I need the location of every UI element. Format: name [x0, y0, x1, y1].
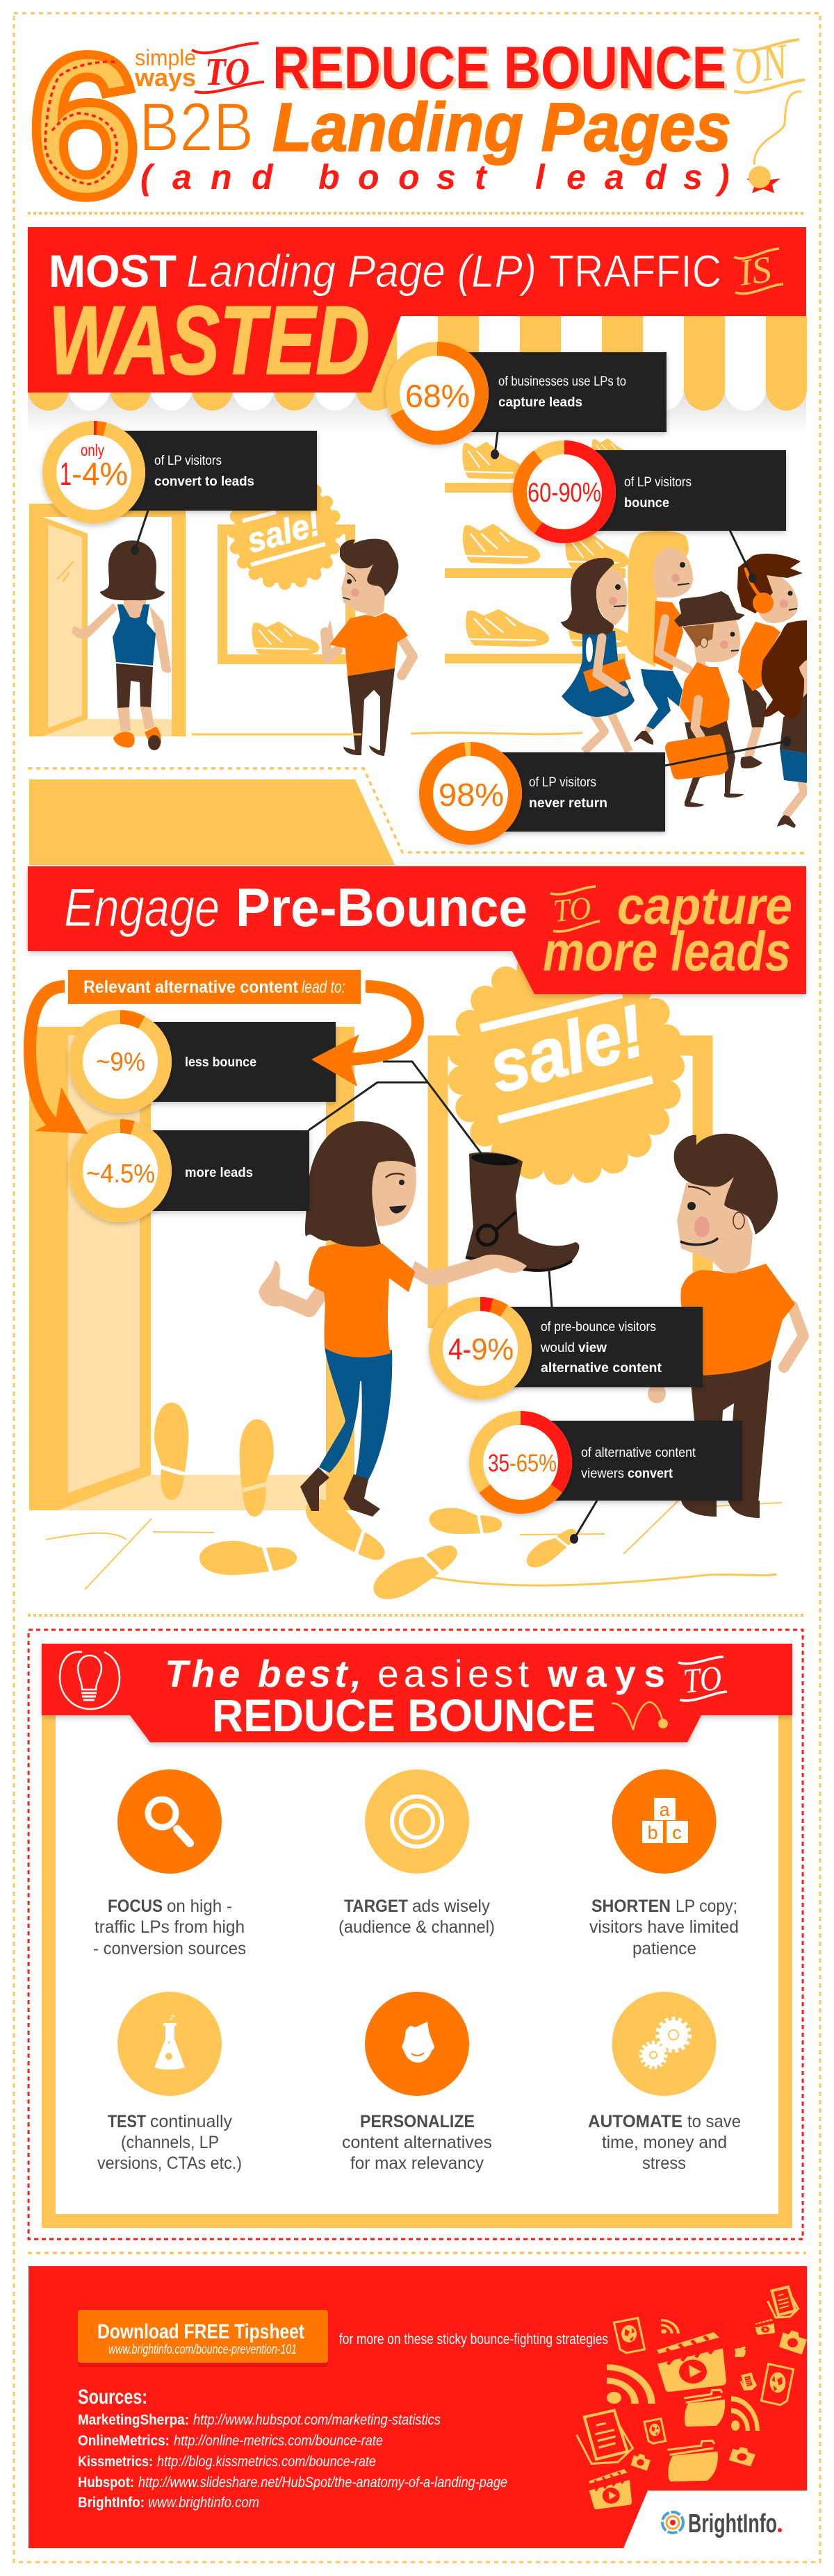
sources list: http://www.slideshare.net/HubSpot/the-anatomy-of-a-landing-page [138, 2475, 507, 2491]
icon: head [402, 2022, 434, 2063]
sources list: BrightInfo: [78, 2495, 145, 2511]
boot product [466, 1152, 579, 1271]
callout 4-9 percent: alternative content [541, 1361, 662, 1376]
arrow right to less bounce [311, 986, 418, 1087]
stat value [448, 1332, 514, 1367]
stat value [488, 1450, 557, 1477]
footer panel [28, 2266, 807, 2548]
relevant content label: Relevant alternative content [83, 977, 299, 997]
callout 60-90 percent: of LP visitors [624, 475, 692, 490]
banner heading line: MOST [49, 245, 177, 297]
callout 4-9 percent: of pre-bounce visitors [541, 1320, 656, 1335]
callout 60-90 percent: bounce [624, 496, 669, 511]
callout 4-9 percent: view [578, 1341, 607, 1355]
tip shorten: LP copy; [676, 1897, 737, 1916]
and boost leads: (and boost leads) [140, 158, 730, 197]
tip focus: FOCUS [108, 1897, 163, 1916]
stat value: -65% [509, 1450, 557, 1477]
connector lines section 1 [131, 432, 791, 766]
serif word TO: TO [205, 51, 250, 94]
stat value: 98% [439, 777, 504, 813]
capture more leads: capture [617, 877, 792, 936]
callout 1-4 percent: of LP visitors [154, 454, 222, 468]
sources list: Sources: [78, 2386, 147, 2409]
tip test [97, 1992, 242, 2173]
headphone man [737, 554, 803, 768]
tip focus: traffic LPs from high [95, 1917, 245, 1937]
shoppers group [561, 531, 808, 828]
relevant content label: lead to: [302, 977, 345, 997]
tips panel [28, 1630, 803, 2239]
callout 35-65 percent: viewers [581, 1467, 624, 1481]
stat value: 9% [471, 1332, 514, 1367]
sources list: www.brightinfo.com [148, 2495, 259, 2511]
tip target: TARGET [344, 1897, 408, 1916]
sources list: Hubspot: [78, 2475, 134, 2491]
heading line: easiest [377, 1652, 529, 1695]
woman with blue dress [561, 558, 635, 752]
callout 1-4 percent [42, 421, 317, 524]
icon: target [392, 1797, 442, 1847]
download button: www.brightinfo.com/bounce-prevention-101 [108, 2343, 297, 2357]
icon: abc blocks: c [672, 1822, 682, 1843]
icon: magnifier [148, 1799, 190, 1843]
callout 4.5 percent more leads: more leads [185, 1166, 253, 1180]
tip automate: time, money and [602, 2133, 727, 2152]
tips red banner [42, 1644, 792, 1742]
serif word ON: ON [730, 33, 792, 96]
banner heading: Pre-Bounce [236, 877, 528, 938]
tip focus: - conversion sources [93, 1939, 246, 1958]
woman section 2 [259, 1121, 527, 1517]
section 1 red banner [28, 227, 806, 395]
awning [28, 316, 807, 432]
shoe in window [252, 622, 319, 655]
tip personalize: PERSONALIZE [360, 2112, 475, 2131]
sources list [78, 2386, 507, 2511]
tip shorten: patience [632, 1939, 696, 1958]
section 2 red banner [28, 866, 806, 994]
sale label: sale! [481, 990, 653, 1109]
serif word TO: TO [552, 890, 593, 929]
blonde woman [627, 531, 693, 745]
callout 9 percent less bounce [69, 1010, 336, 1113]
capture more leads: more leads [543, 920, 791, 982]
icon: flask [154, 2015, 185, 2070]
store door left [29, 504, 186, 736]
tip shorten: SHORTEN [591, 1897, 671, 1916]
tip automate [588, 1992, 741, 2173]
icon: abc blocks: b [647, 1822, 658, 1843]
sale window section 2 [438, 962, 703, 1328]
tip automate: to save [687, 2112, 741, 2131]
callout 1-4 percent: convert to leads [154, 474, 254, 489]
tip personalize: content alternatives [342, 2133, 492, 2152]
heading line: The best, [165, 1652, 361, 1695]
sale label: sale! [243, 504, 324, 561]
icon: lightbulb [60, 1652, 120, 1709]
shopkeeper man [325, 539, 413, 756]
icon: abc blocks [642, 1798, 688, 1843]
callout 4-9 percent: would [540, 1341, 575, 1355]
arrow left to more leads [30, 986, 88, 1134]
heading line REDUCE BOUNCE: REDUCE BOUNCE [272, 35, 726, 101]
man with hat and suitcase [665, 591, 745, 807]
callout 98 percent: never return [529, 796, 607, 811]
stat value: only [81, 441, 104, 459]
BrightInfo logo: BrightInfo [688, 2509, 777, 2538]
stat value: 35 [488, 1450, 509, 1477]
callout 9 percent less bounce: less bounce [185, 1055, 256, 1070]
relevant content label [68, 970, 361, 1004]
footprints and floor lines [46, 1403, 782, 1607]
tip target [338, 1769, 495, 1937]
banner heading [64, 877, 528, 938]
banner heading line: TRAFFIC [549, 245, 721, 297]
download button [78, 2310, 328, 2367]
callout 68 percent: capture leads [498, 395, 582, 410]
banner heading line: Landing Page (LP) [186, 245, 537, 297]
sources list: http://online-metrics.com/bounce-rate [174, 2433, 383, 2449]
tip shorten [589, 1769, 739, 1958]
WASTED: WASTED [49, 286, 370, 395]
sources list: http://www.hubspot.com/marketing-statistics [193, 2412, 441, 2428]
subtitle simple ways [134, 45, 196, 92]
bounce squiggle [612, 1702, 668, 1730]
lower section shape [28, 768, 806, 865]
stat value: 4- [448, 1332, 471, 1367]
subtitle simple ways: simple [135, 45, 196, 70]
banner heading line [49, 245, 721, 297]
stat value: 68% [405, 378, 470, 414]
media icon cluster [577, 2287, 807, 2509]
callout 4-9 percent [429, 1297, 703, 1400]
tip test: versions, CTAs etc.) [97, 2154, 242, 2173]
callout 98 percent: of LP visitors [529, 775, 596, 790]
numeral 6: 6 [31, 20, 136, 231]
serif word TO [192, 43, 264, 94]
stat value [60, 441, 128, 492]
tip automate: stress [642, 2154, 686, 2173]
sources list: Kissmetrics: [78, 2454, 153, 2470]
sources list: http://blog.kissmetrics.com/bounce-rate [157, 2454, 376, 2470]
callout 35-65 percent: convert [628, 1467, 673, 1481]
woman entering door [72, 540, 171, 750]
callout 68 percent: of businesses use LPs to [498, 374, 626, 389]
callout 35-65 percent [469, 1411, 742, 1514]
sources list: OnlineMetrics: [78, 2433, 170, 2449]
tip personalize: for max relevancy [350, 2154, 484, 2173]
callout 68 percent [386, 342, 667, 445]
banner heading: Engage [64, 877, 220, 938]
icon: abc blocks: a [659, 1799, 670, 1820]
title block [31, 20, 805, 231]
icon: gears [641, 2019, 689, 2067]
tip test: continually [150, 2112, 232, 2131]
stat value: -4% [72, 456, 128, 492]
tip focus: on high - [167, 1897, 232, 1916]
tip personalize [342, 1992, 492, 2173]
tip automate: AUTOMATE [588, 2112, 682, 2131]
serif word IS: IS [735, 248, 774, 294]
REDUCE BOUNCE: REDUCE BOUNCE [212, 1690, 596, 1741]
Landing Pages: Landing Pages [272, 89, 731, 165]
heading line [165, 1652, 665, 1695]
stat value: 1 [60, 456, 72, 492]
stat value: ~9% [96, 1048, 145, 1077]
subtitle simple ways: ways [134, 63, 196, 92]
capture more leads [543, 877, 792, 982]
man section 2 [648, 1134, 803, 1518]
heading line REDUCE BOUNCE: REDUCE BOUNCE [275, 37, 729, 104]
heading line: ways [547, 1652, 665, 1695]
tip test: (channels, LP [121, 2133, 219, 2152]
squiggle exclamation mark [746, 92, 801, 193]
sources list: MarketingSherpa: [78, 2412, 189, 2428]
sale window with badge [222, 481, 350, 659]
shoe shelves [445, 438, 632, 663]
tip focus [93, 1769, 246, 1958]
B2B: B2B [139, 88, 254, 165]
BrightInfo logo [662, 2509, 782, 2538]
tip target: ads wisely [412, 1897, 490, 1916]
callout 98 percent [419, 742, 665, 845]
stat value: 60-90% [528, 478, 601, 508]
store door section 2 [29, 1027, 354, 1510]
callout 4.5 percent more leads [69, 1119, 309, 1222]
download caption: for more on these sticky bounce-fighting strategies [339, 2331, 608, 2347]
stat value: ~4.5% [86, 1159, 155, 1189]
download button: Download FREE Tipsheet [97, 2320, 304, 2343]
tip shorten: visitors have limited [589, 1917, 739, 1937]
curly hair woman [762, 620, 808, 828]
connector lines section 2 [309, 1062, 597, 1544]
callout 35-65 percent: of alternative content [581, 1446, 696, 1460]
tip test: TEST [108, 2112, 146, 2131]
serif word TO: TO [681, 1658, 723, 1701]
callout 60-90 percent [513, 440, 786, 543]
tip target: (audience & channel) [338, 1917, 495, 1937]
